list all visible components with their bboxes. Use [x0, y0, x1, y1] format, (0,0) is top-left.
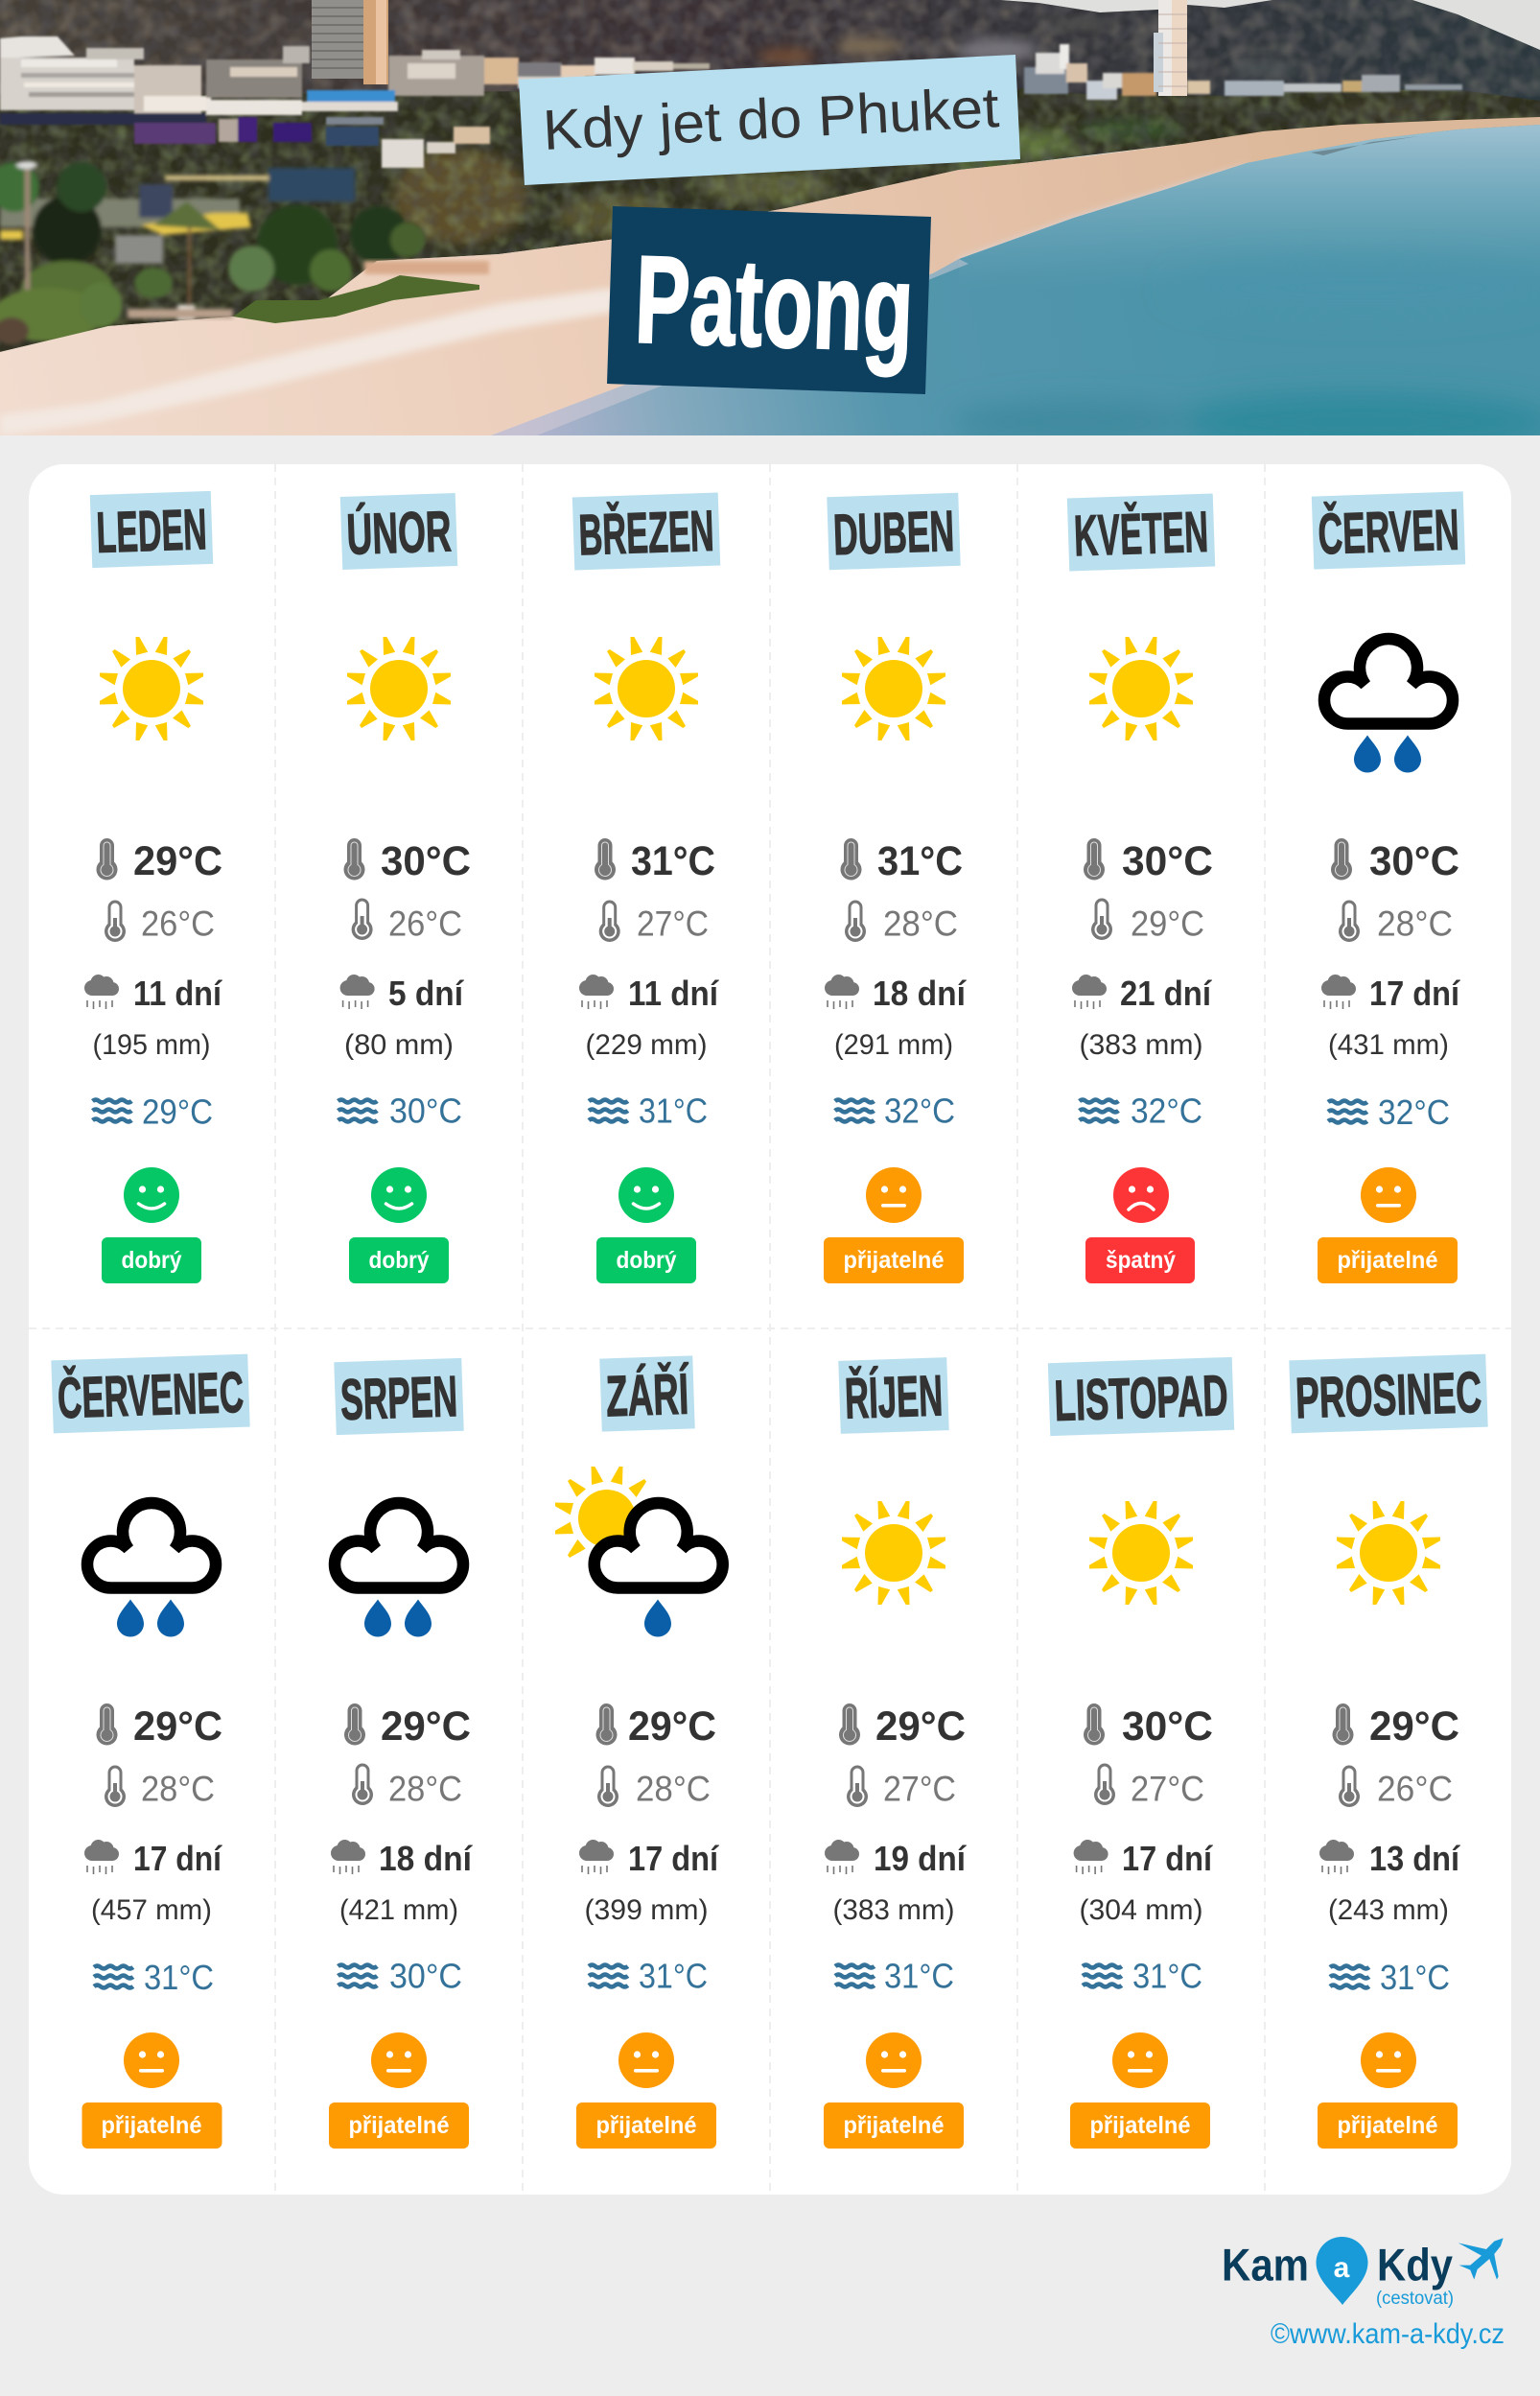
hero: wash on the sand: [0, 165, 1247, 435]
rainy days: [340, 974, 464, 1013]
rating smiley: [866, 2032, 922, 2088]
rainy days: 17 dní: [133, 1839, 222, 1878]
icon: sun: [1337, 1501, 1440, 1605]
month heading: [1312, 491, 1465, 570]
icon: sun: [842, 637, 945, 740]
rating badge: [349, 1237, 449, 1283]
logo: Kam a Kdy: Kam: [1222, 2240, 1309, 2290]
max temperature: 29°C: [381, 1703, 471, 1750]
min temperature: [105, 900, 215, 944]
month heading: DUBEN: [832, 499, 955, 567]
rating smiley: [1361, 1167, 1416, 1223]
rainy days: 11 dní: [628, 974, 719, 1013]
rating smiley: [618, 2032, 674, 2088]
sea temperature: [1080, 1092, 1202, 1130]
rating smiley: [371, 1167, 427, 1223]
sea temperature: [338, 1092, 462, 1130]
rating badge: [824, 2102, 964, 2149]
sea temperature: 31°C: [1132, 1957, 1202, 1995]
month heading: [340, 493, 457, 570]
rainy days: 18 dní: [379, 1839, 473, 1878]
rating badge: [1318, 1237, 1458, 1283]
rainfall: (243 mm): [1328, 1894, 1449, 1926]
min temperature: 26°C: [1377, 1770, 1453, 1809]
rating badge: špatný: [1106, 1247, 1176, 1274]
max temperature: 30°C: [1122, 838, 1213, 884]
month heading: KVĚTEN: [1073, 500, 1209, 568]
min temperature: 28°C: [636, 1770, 711, 1809]
panel: červenec: [51, 1354, 250, 2149]
sea temperature: 31°C: [144, 1958, 214, 1997]
month heading: ČERVENEC: [57, 1360, 245, 1430]
icon: rain cloud: [87, 1503, 216, 1636]
banner: Kdy jet do Phuket: Kdy jet do Phuket: [542, 76, 1000, 162]
max temperature: [1084, 838, 1213, 884]
icon: rain cloud: [1324, 639, 1453, 773]
max temperature: 31°C: [877, 838, 963, 884]
logo: Kam a Kdy: [1222, 2237, 1504, 2309]
rating smiley: [124, 2032, 179, 2088]
panel: leden: [84, 491, 222, 1283]
rainfall: (304 mm): [1080, 1894, 1202, 1926]
rating smiley: [1361, 2032, 1416, 2088]
panel: srpen: [329, 1358, 473, 2149]
month heading: [334, 1358, 464, 1435]
sea temperature: [589, 1092, 708, 1130]
rainy days: [1072, 974, 1212, 1013]
panel: listopad: [1048, 1357, 1234, 2149]
icon: sun: [595, 637, 698, 740]
max temperature: 30°C: [1369, 838, 1459, 884]
min temperature: 27°C: [637, 904, 709, 944]
rainy days: [579, 1839, 719, 1878]
rating smiley: [1113, 1167, 1169, 1223]
rating badge: [596, 1237, 696, 1283]
rating badge: [824, 1237, 964, 1283]
rainfall: (291 mm): [834, 1029, 953, 1061]
sea temperature: [338, 1957, 462, 1995]
rainy days: [84, 1839, 222, 1878]
icon: rain cloud: [335, 1503, 463, 1636]
rainy days: 5 dní: [388, 974, 464, 1013]
rating badge: přijatelné: [844, 2112, 945, 2139]
rating badge: [1318, 2102, 1458, 2149]
rainy days: [84, 974, 222, 1013]
rainfall: (383 mm): [832, 1894, 955, 1926]
rating badge: přijatelné: [1089, 2112, 1191, 2139]
min temperature: 28°C: [141, 1770, 215, 1809]
icon: sun: [842, 1501, 945, 1605]
sea temperature: 32°C: [1378, 1092, 1450, 1132]
panel: duben: [824, 493, 967, 1283]
max temperature: 29°C: [1369, 1703, 1459, 1750]
rainfall: (421 mm): [339, 1894, 458, 1926]
panel: červen: [1312, 491, 1465, 1283]
rating badge: [1085, 1237, 1195, 1283]
rainfall: (431 mm): [1328, 1029, 1449, 1061]
min temperature: 27°C: [883, 1770, 956, 1809]
rainy days: [825, 974, 967, 1013]
max temperature: 30°C: [381, 838, 471, 884]
min temperature: [352, 898, 462, 944]
hero photo: Patong beach: [0, 0, 1540, 451]
icon: map pin: [1316, 2237, 1367, 2305]
rating badge: přijatelné: [844, 1247, 945, 1274]
banner: Kdy jet do Phuket: [519, 55, 1020, 185]
min temperature: [1339, 1765, 1453, 1809]
sea temperature: 31°C: [639, 1092, 708, 1130]
rating badge: [329, 2102, 469, 2149]
rainy days: [1074, 1839, 1213, 1878]
rating badge: přijatelné: [102, 2112, 202, 2139]
min temperature: [105, 1765, 215, 1809]
sea temperature: 32°C: [884, 1092, 955, 1130]
rating smiley: [124, 1167, 179, 1223]
rainy days: 11 dní: [133, 974, 222, 1013]
rainy days: [579, 974, 719, 1013]
month heading: SRPEN: [339, 1364, 458, 1432]
min temperature: [845, 900, 958, 944]
max temperature: [1333, 1703, 1459, 1750]
rainy days: [825, 1839, 967, 1878]
max temperature: [343, 838, 471, 884]
icon: airplane: [1458, 2238, 1504, 2280]
sea temperature: 31°C: [639, 1957, 708, 1995]
month heading: LEDEN: [95, 497, 208, 565]
hero: grass patch: [233, 275, 479, 323]
max temperature: [1331, 838, 1459, 884]
rainy days: 17 dní: [628, 1839, 719, 1878]
rainy days: 19 dní: [874, 1839, 967, 1878]
panel: březen: [572, 493, 720, 1283]
rating smiley: [1112, 2032, 1168, 2088]
rainfall: (457 mm): [91, 1894, 212, 1926]
month heading: ZÁŘÍ: [605, 1362, 690, 1428]
max temperature: 29°C: [875, 1703, 966, 1750]
rainy days: 17 dní: [1122, 1839, 1213, 1878]
rainy days: 21 dní: [1120, 974, 1212, 1013]
max temperature: [96, 838, 222, 884]
sea temperature: [835, 1957, 954, 1995]
sea temperature: [94, 1958, 214, 1997]
rating badge: přijatelné: [1337, 2112, 1438, 2139]
rainfall: (399 mm): [585, 1894, 708, 1926]
logo: Kam a Kdy: Kdy: [1377, 2240, 1453, 2290]
panel: květen: [1067, 494, 1215, 1283]
rainy days: [1319, 1839, 1460, 1878]
hero: beach: [0, 117, 1540, 435]
month heading: [51, 1354, 250, 1433]
icon: map pin: a: [1334, 2252, 1350, 2284]
icon: sun: [1089, 1501, 1193, 1605]
sea temperature: [589, 1957, 708, 1995]
min temperature: 27°C: [1131, 1770, 1204, 1809]
sea temperature: 30°C: [389, 1957, 462, 1995]
rating badge: [1070, 2102, 1210, 2149]
max temperature: 30°C: [1122, 1703, 1213, 1750]
panel: říjen: [824, 1357, 967, 2149]
sea temperature: 31°C: [1380, 1958, 1450, 1997]
min temperature: [597, 1765, 711, 1809]
month heading: [1048, 1357, 1234, 1436]
icon: sun behind rain cloud: [555, 1467, 723, 1636]
month heading: ŘÍJEN: [844, 1363, 944, 1431]
rainy days: 13 dní: [1369, 1839, 1460, 1878]
month heading: [599, 1355, 695, 1432]
panel: září: [555, 1355, 723, 2149]
min temperature: 28°C: [883, 904, 958, 944]
rating badge: [102, 1237, 201, 1283]
sea temperature: [1330, 1958, 1450, 1997]
max temperature: 29°C: [133, 838, 222, 884]
rating smiley: [866, 1167, 922, 1223]
hero: town details by the shore: [0, 161, 425, 344]
rating badge: [82, 2102, 222, 2149]
rating badge: přijatelné: [1337, 1247, 1438, 1274]
max temperature: [96, 1703, 222, 1750]
rating smiley: [371, 2032, 427, 2088]
sea temperature: 30°C: [389, 1092, 462, 1130]
rainfall: (195 mm): [92, 1029, 211, 1061]
sea temperature: [835, 1092, 955, 1130]
rating smiley: [618, 1167, 674, 1223]
min temperature: [599, 900, 709, 944]
min temperature: [1091, 898, 1204, 944]
rating badge: přijatelné: [596, 2112, 697, 2139]
max temperature: [595, 838, 715, 884]
sea temperature: [1083, 1957, 1202, 1995]
month heading: [572, 493, 720, 570]
sea temperature: [92, 1092, 213, 1132]
website credit: ©www.kam-a-kdy.cz: [1271, 2318, 1505, 2350]
white card with the months: [29, 464, 1511, 2195]
sea temperature: 29°C: [142, 1092, 213, 1132]
panel: prosinec: [1289, 1354, 1488, 2149]
banner: Patong: [607, 206, 931, 394]
icon: sun: [1089, 637, 1193, 740]
sea temperature: [1328, 1092, 1450, 1132]
max temperature: 29°C: [628, 1703, 716, 1750]
panel: únor: [338, 493, 471, 1283]
min temperature: [847, 1765, 956, 1809]
min temperature: 29°C: [1131, 904, 1204, 944]
hero: sea: [491, 125, 1540, 435]
rainy days: [331, 1839, 473, 1878]
min temperature: 28°C: [1377, 904, 1453, 944]
month heading: BŘEZEN: [577, 499, 715, 567]
min temperature: [1339, 900, 1453, 944]
month heading: [1067, 494, 1215, 571]
logo: Kam a Kdy: (cestovat): [1376, 2289, 1454, 2309]
rating badge: dobrý: [616, 1247, 677, 1274]
rainy days: 18 dní: [873, 974, 967, 1013]
max temperature: 29°C: [133, 1703, 222, 1750]
sea temperature: 32°C: [1131, 1092, 1202, 1130]
month heading: ÚNOR: [345, 499, 453, 567]
rainy days: [1321, 974, 1460, 1013]
icon: sun: [347, 637, 451, 740]
rainfall: (383 mm): [1080, 1029, 1202, 1061]
min temperature: 26°C: [141, 904, 215, 944]
icon: sun: [100, 637, 203, 740]
rating badge: přijatelné: [349, 2112, 450, 2139]
min temperature: 26°C: [388, 904, 462, 944]
rainy days: 17 dní: [1369, 974, 1460, 1013]
month heading: [838, 1357, 949, 1434]
month heading: [90, 491, 213, 568]
banner: Patong: Patong: [633, 230, 916, 378]
hero: towers: [312, 0, 1187, 96]
max temperature: [1084, 1703, 1213, 1750]
min temperature: [352, 1763, 462, 1809]
hero: tree line: [0, 88, 1540, 352]
rating badge: dobrý: [368, 1247, 430, 1274]
rating badge: [576, 2102, 716, 2149]
min temperature: 28°C: [388, 1770, 462, 1809]
month heading: LISTOPAD: [1053, 1363, 1229, 1433]
max temperature: 31°C: [631, 838, 715, 884]
rainfall: (229 mm): [585, 1029, 708, 1061]
hero: town buildings: [0, 36, 1462, 168]
max temperature: [840, 838, 963, 884]
min temperature: [1094, 1763, 1204, 1809]
rainfall: (80 mm): [344, 1029, 454, 1061]
sea temperature: 31°C: [884, 1957, 954, 1995]
month heading: [827, 493, 961, 570]
rating badge: dobrý: [121, 1247, 182, 1274]
